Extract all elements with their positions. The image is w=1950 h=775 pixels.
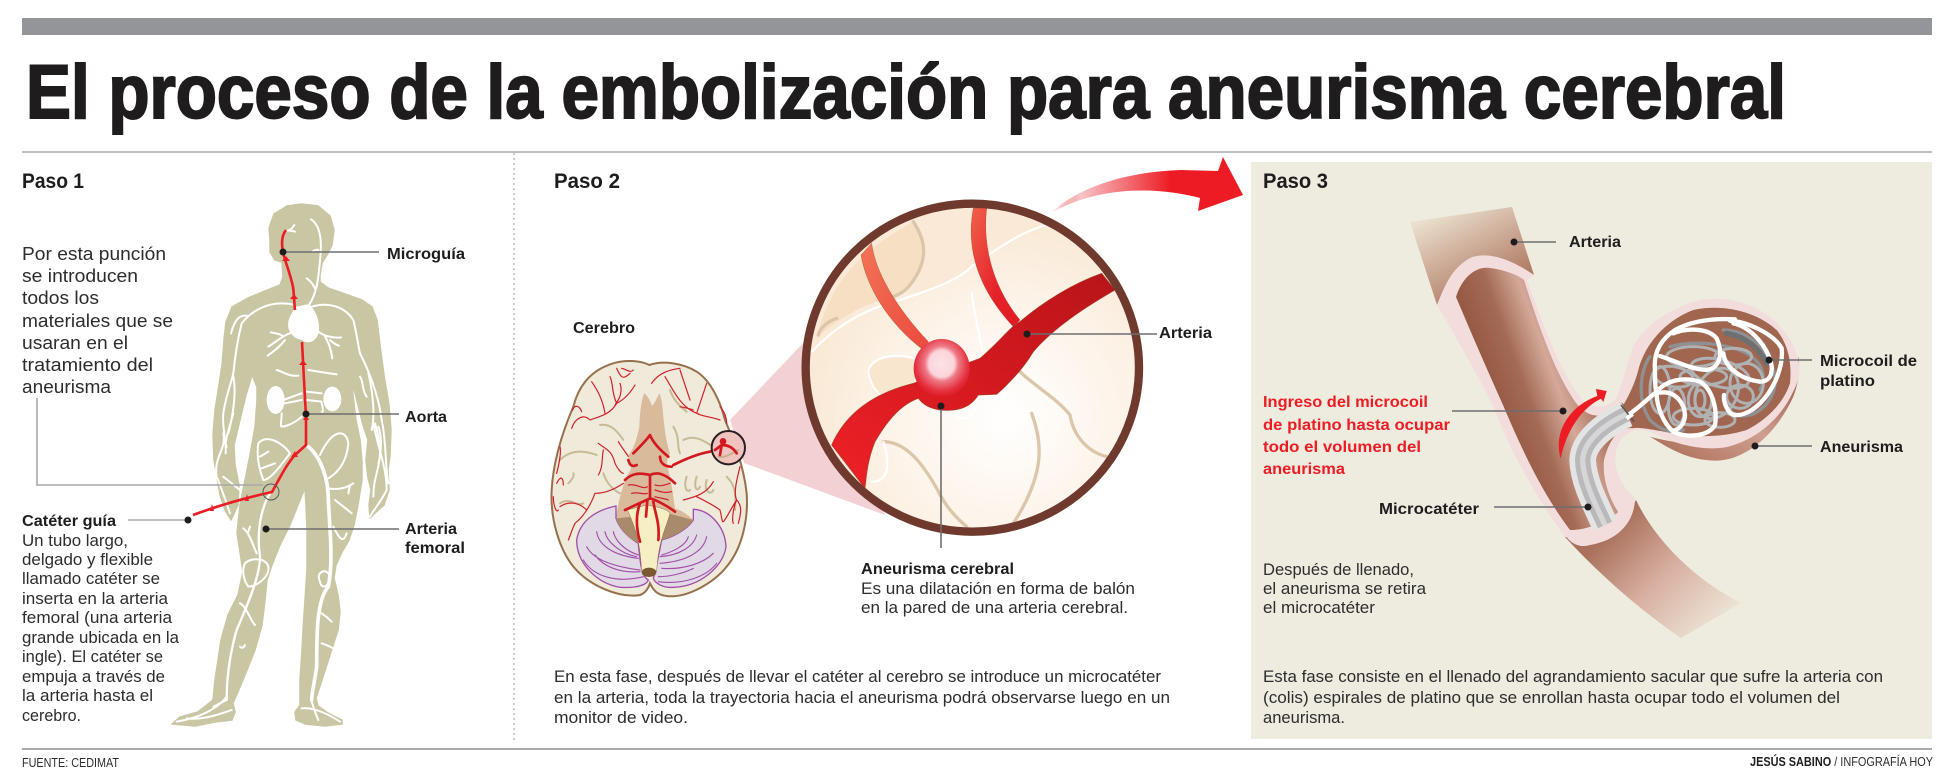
text block: punción: aneurisma [22,376,112,397]
aneurysm outer shade [1650,357,1799,461]
surface arteries [572,368,635,428]
text block: catéter guía: femoral (una arteria [22,608,173,627]
gray coils [1641,330,1775,431]
label: cerebro: Cerebro [573,320,635,337]
panel: paso 3 background [1251,162,1932,739]
label: ingreso del microcoil: aneurisma [1263,461,1345,478]
heading: paso 2: Paso 2 [554,170,620,193]
magnified view [806,204,1139,532]
microcatheter [1583,414,1627,525]
text block: paso 2 description [554,667,1170,727]
text block: paso 3 description: aneurisma. [1263,708,1345,727]
puncture leader [37,398,279,500]
white coils [1627,319,1782,436]
label: arteria: Arteria [1569,234,1621,251]
text block: después de llenado: Después de llenado, [1263,560,1414,579]
text block: aneurisma cerebral: en la pared de una arteria cerebral. [861,598,1128,617]
heading: paso 1: Paso 1 [22,170,84,193]
text block: después de llenado: el microcatéter [1263,598,1375,617]
label: arteria femoral: femoral [405,540,465,557]
text block: aneurisma cerebral [861,561,1135,617]
artery lumen [1456,268,1632,530]
text block: punción: materiales que se [22,310,173,331]
text block: después de llenado: el aneurisma se retira [1263,579,1427,598]
central arteries [625,435,720,542]
brain folds [818,222,1107,527]
text block: catéter guía: ingle). El catéter se [22,647,163,666]
arrow: to paso 3 [1051,157,1243,213]
text block: paso 3 description [1263,667,1883,727]
aneurysm with coils [1559,308,1791,525]
text block: paso 2 description: en la arteria, toda la trayectoria hacia el aneurisma podrá observarse luego en un [554,688,1170,707]
text block: paso 3 description: Esta fase consiste en el llenado del agrandamiento sacular que sufre la arteria con [1263,667,1883,686]
text block: catéter guía: grande ubicada en la [22,628,180,647]
red catheter path [193,230,309,515]
label: microcoil de platino: platino [1820,373,1875,390]
label: microcoil de platino [1766,353,1917,390]
label: microguía [280,246,465,263]
text block: catéter guía: llamado catéter se [22,569,160,588]
text block: catéter guía: cerebro. [22,706,81,725]
label leader: aneurisma cerebral [938,402,944,548]
cerebellum [577,506,726,588]
panel: paso 1 [22,157,1934,770]
label leader: catéter guía [128,516,192,524]
text block: catéter guía [22,513,180,725]
text block: catéter guía: la arteria hasta el [22,686,153,705]
main artery [832,273,1115,488]
artery lower outer section [1565,500,1741,638]
brain folds [560,390,735,510]
text block: catéter guía: Un tubo largo, [22,531,128,550]
credit: JESÚS SABINO / INFOGRAFÍA HOY [1750,754,1934,769]
text block: punción: Por esta punción [22,243,166,264]
text block: catéter guía: empuja a través de [22,667,165,686]
text block: después de llenado [1263,560,1427,617]
label: ingreso del microcoil: todo el volumen del [1263,439,1421,456]
label: ingreso del microcoil: Ingreso del microcoil [1263,394,1428,411]
text block: catéter guía: Catéter guía [22,513,116,530]
upper body vessels and organs [223,219,388,483]
text block: paso 2 description: En esta fase, después de llevar el catéter al cerebro se introduce un microcatéter [554,667,1161,686]
top gray bar [22,18,1932,35]
label: arteria [1510,234,1621,251]
label: aneurisma [1752,439,1903,456]
label: ingreso del microcoil: de platino hasta ocupar [1263,417,1450,434]
lateral stem shading [616,513,693,543]
label: ingreso del microcoil [1263,394,1566,478]
lower wall arc [1562,498,1635,546]
label: arteria [1024,325,1212,342]
branch arteries [861,243,928,350]
text block: punción: usaran en el [22,332,128,353]
label: arteria femoral [262,521,465,557]
text block: paso 3 description: (colis) espirales de platino que se enrollan hasta ocupar todo el volumen del [1263,688,1840,707]
label: microcoil de platino: Microcoil de [1820,353,1917,370]
artery illustration [1410,207,1799,638]
human body figure [172,204,391,726]
panel: paso 2 [551,157,1243,727]
label: microcatéter [1379,501,1592,518]
magnifier cone [730,340,885,515]
text block: paso 2 description: monitor de video. [554,708,688,727]
red arrow [1559,389,1607,458]
artery upper outer section [1410,207,1534,305]
text block: aneurisma cerebral: Es una dilatación en forma de balón [861,579,1135,598]
text block: catéter guía: inserta en la arteria [22,589,169,608]
text block: aneurisma cerebral: Aneurisma cerebral [861,561,1014,578]
zoom circle on brain [712,431,745,464]
label: microcatéter: Microcatéter [1379,501,1479,518]
text block: punción: tratamiento del [22,354,153,375]
artery wall [1437,255,1799,537]
aneurysm bulb [914,339,970,398]
label: aorta: Aorta [405,409,447,426]
label: arteria femoral: Arteria [405,521,457,538]
aneurysm cavity [1623,308,1791,436]
label: microguía: Microguía [387,246,465,263]
text block: punción [22,243,173,397]
lower body vessels [177,413,387,722]
text block: punción: todos los [22,287,99,308]
panel: paso 3 [1263,170,1917,727]
brain stem [616,393,693,543]
text block: catéter guía: delgado y flexible [22,550,153,569]
label: arteria: Arteria [1159,325,1212,342]
label: aorta [302,409,447,426]
spinal column [627,505,670,572]
source note: FUENTE: CEDIMAT [22,755,119,770]
text block: punción: se introducen [22,265,138,286]
label: aneurisma: Aneurisma [1820,439,1903,456]
heading: paso 3: Paso 3 [1263,170,1328,193]
brain illustration [551,361,747,596]
